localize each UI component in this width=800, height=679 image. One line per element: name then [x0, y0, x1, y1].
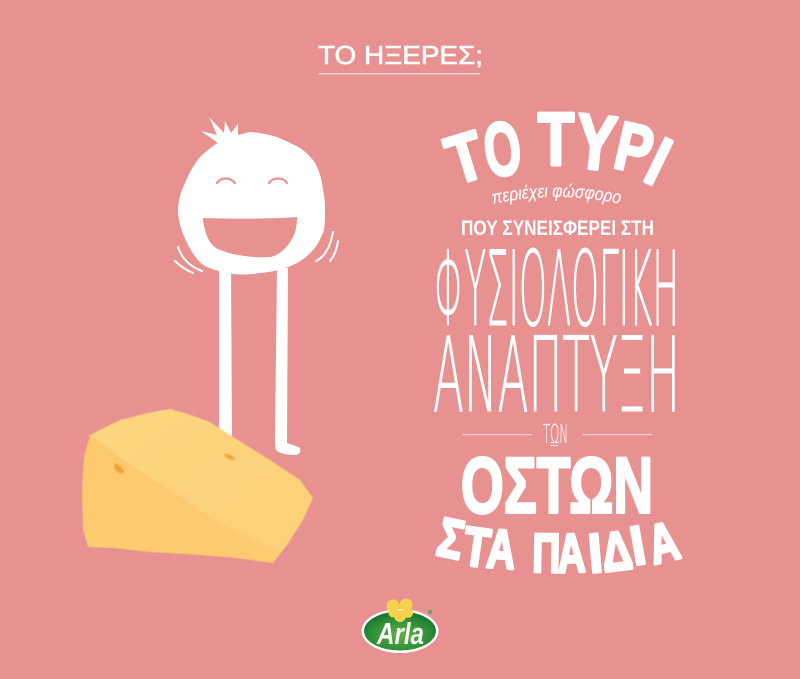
figure head and hair [178, 117, 325, 274]
cheese wedge [82, 409, 313, 563]
line: in children: Ι [586, 523, 605, 585]
line: in children: Π [532, 523, 561, 585]
figure legs [219, 268, 300, 455]
headline: the cheese: Ρ [608, 108, 660, 190]
headline: the cheese: Ι [634, 124, 682, 200]
heading: did you know: ΤΟ ΗΞΕΡΕΣ; [318, 40, 483, 70]
subheading: contains phosphorus: περιέχει φώσφορο [492, 184, 621, 205]
headline: the cheese: Ο [478, 106, 526, 194]
line: that contributes to: ΠΟΥ ΣΥΝΕΙΣΦΕΡΕΙ ΣΤΗ [461, 217, 654, 240]
figure motion lines [175, 232, 338, 273]
cheese top face [90, 409, 313, 563]
line: in children [432, 507, 685, 585]
line: in children: Α [642, 510, 685, 577]
line: in children: Α [556, 523, 586, 585]
cheese front face [82, 435, 280, 563]
logo flower [386, 598, 413, 622]
divider with word: of the: ΤΩΝ [543, 420, 568, 450]
figure mouth [203, 217, 297, 257]
cheese holes [114, 454, 235, 473]
headline: the cheese: Τ [538, 99, 574, 182]
headline: the cheese: Τ [437, 117, 493, 200]
line: bones: ΟΣΤΩΝ [461, 440, 653, 530]
character: smiling figure [175, 117, 338, 455]
line: in children: Α [485, 519, 518, 582]
line: in children: Σ [432, 507, 469, 572]
headline: the cheese [437, 97, 682, 200]
headline: the cheese: Υ [571, 97, 621, 188]
logo badge [362, 609, 438, 653]
line: in children: Δ [598, 520, 635, 584]
logo wordmark: Arla [376, 616, 424, 651]
line: in children: Ι [626, 515, 650, 578]
line: in children: Τ [459, 516, 494, 580]
logo: Arla [362, 598, 438, 653]
figure eyes [217, 178, 287, 183]
